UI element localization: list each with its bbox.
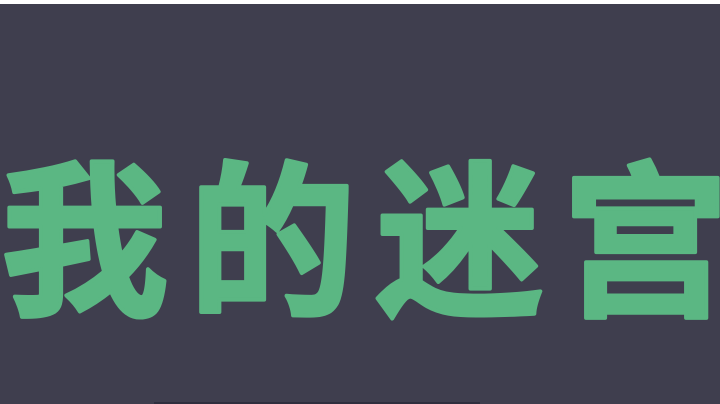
bottom edge strip [154,402,480,404]
title: 的 [189,152,356,338]
title: 我 [1,152,168,338]
top edge strip [0,0,720,4]
title: 迷 [376,152,543,338]
